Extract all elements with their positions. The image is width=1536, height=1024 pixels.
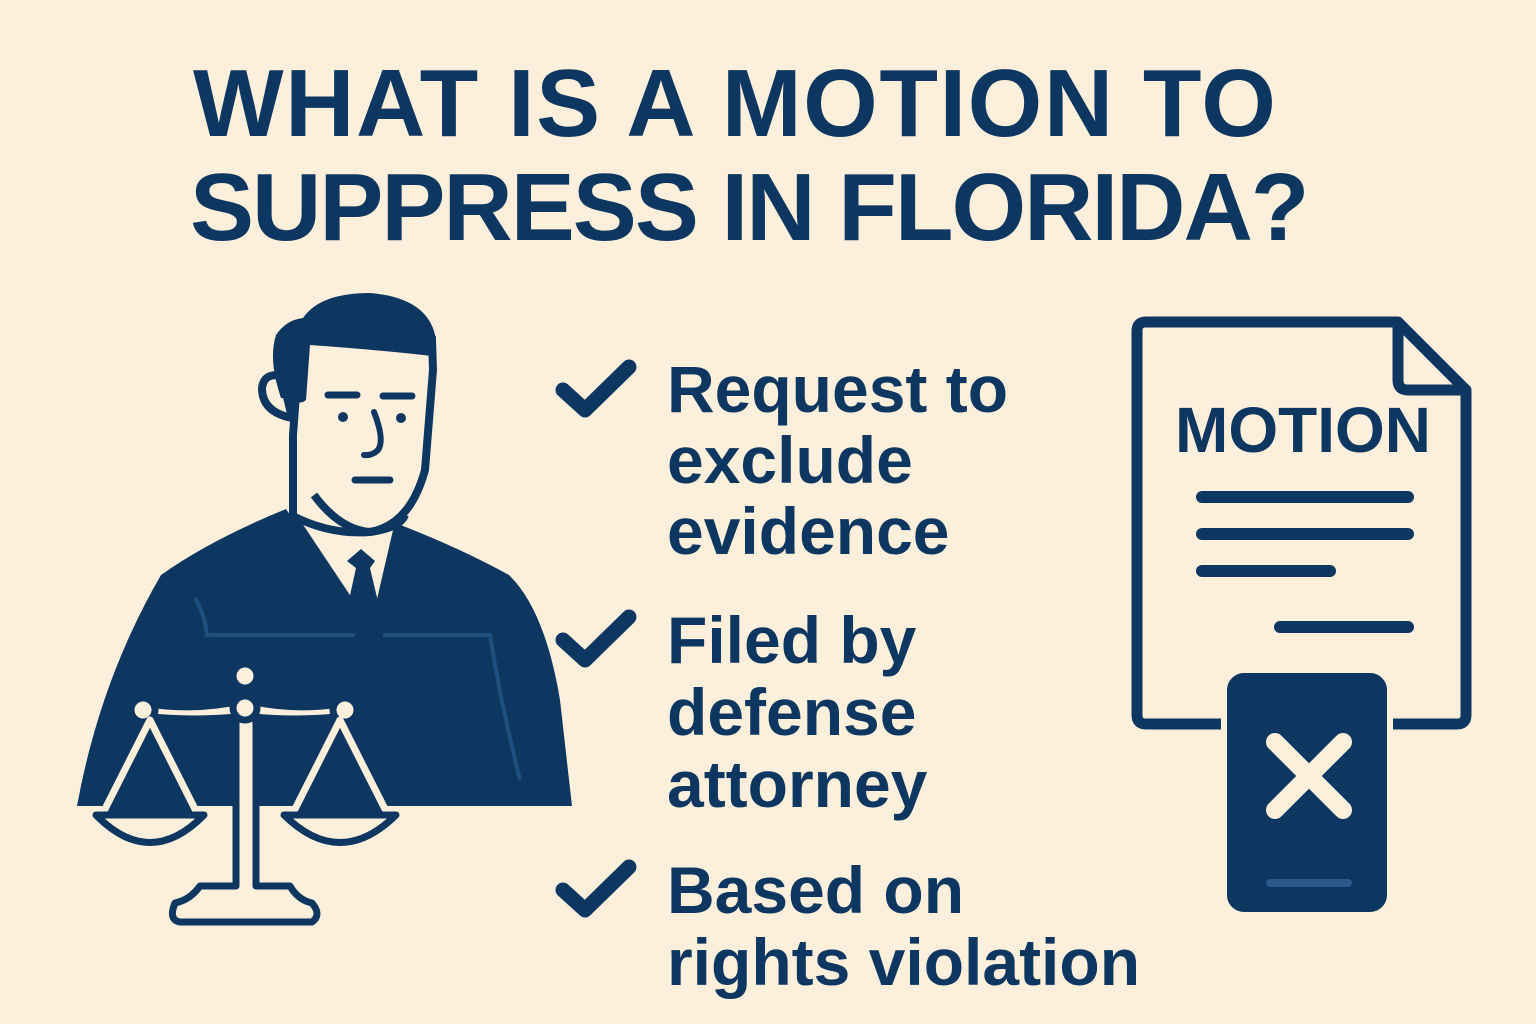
- checklist item 3: [556, 853, 1140, 999]
- title: WHAT IS A MOTION TO: [193, 50, 1277, 157]
- text: request to exclude evidence: exclude: [667, 423, 913, 497]
- rejection card: [1224, 670, 1390, 915]
- checklist item 1: [556, 352, 1008, 568]
- document title: MOTION: [1175, 394, 1431, 466]
- text: based on rights violation: rights violation: [667, 925, 1140, 999]
- face: [328, 395, 412, 480]
- text: based on rights violation: Based on: [667, 853, 964, 927]
- text: based on rights violation: [667, 853, 1140, 999]
- icon: motion document with rejection: [1132, 316, 1472, 912]
- text: request to exclude evidence: evidence: [667, 494, 950, 568]
- icon: scales of justice: [96, 664, 396, 922]
- title: [190, 50, 1307, 261]
- text: filed by defense attorney: [667, 603, 927, 821]
- icon: check: [556, 360, 636, 418]
- text: filed by defense attorney: Filed by: [667, 603, 916, 677]
- icon: check: [556, 610, 636, 668]
- icon: check: [556, 860, 636, 918]
- head: [293, 340, 433, 532]
- robe: [77, 509, 572, 806]
- text: request to exclude evidence: [667, 352, 1008, 568]
- text: filed by defense attorney: defense: [667, 675, 916, 749]
- illustration: judge with scales: [77, 293, 572, 926]
- text: request to exclude evidence: Request to: [667, 352, 1008, 426]
- checklist item 2: [556, 603, 927, 821]
- collar/tie: [293, 516, 398, 606]
- title: SUPPRESS IN FLORIDA?: [190, 154, 1307, 261]
- text: filed by defense attorney: attorney: [667, 747, 927, 821]
